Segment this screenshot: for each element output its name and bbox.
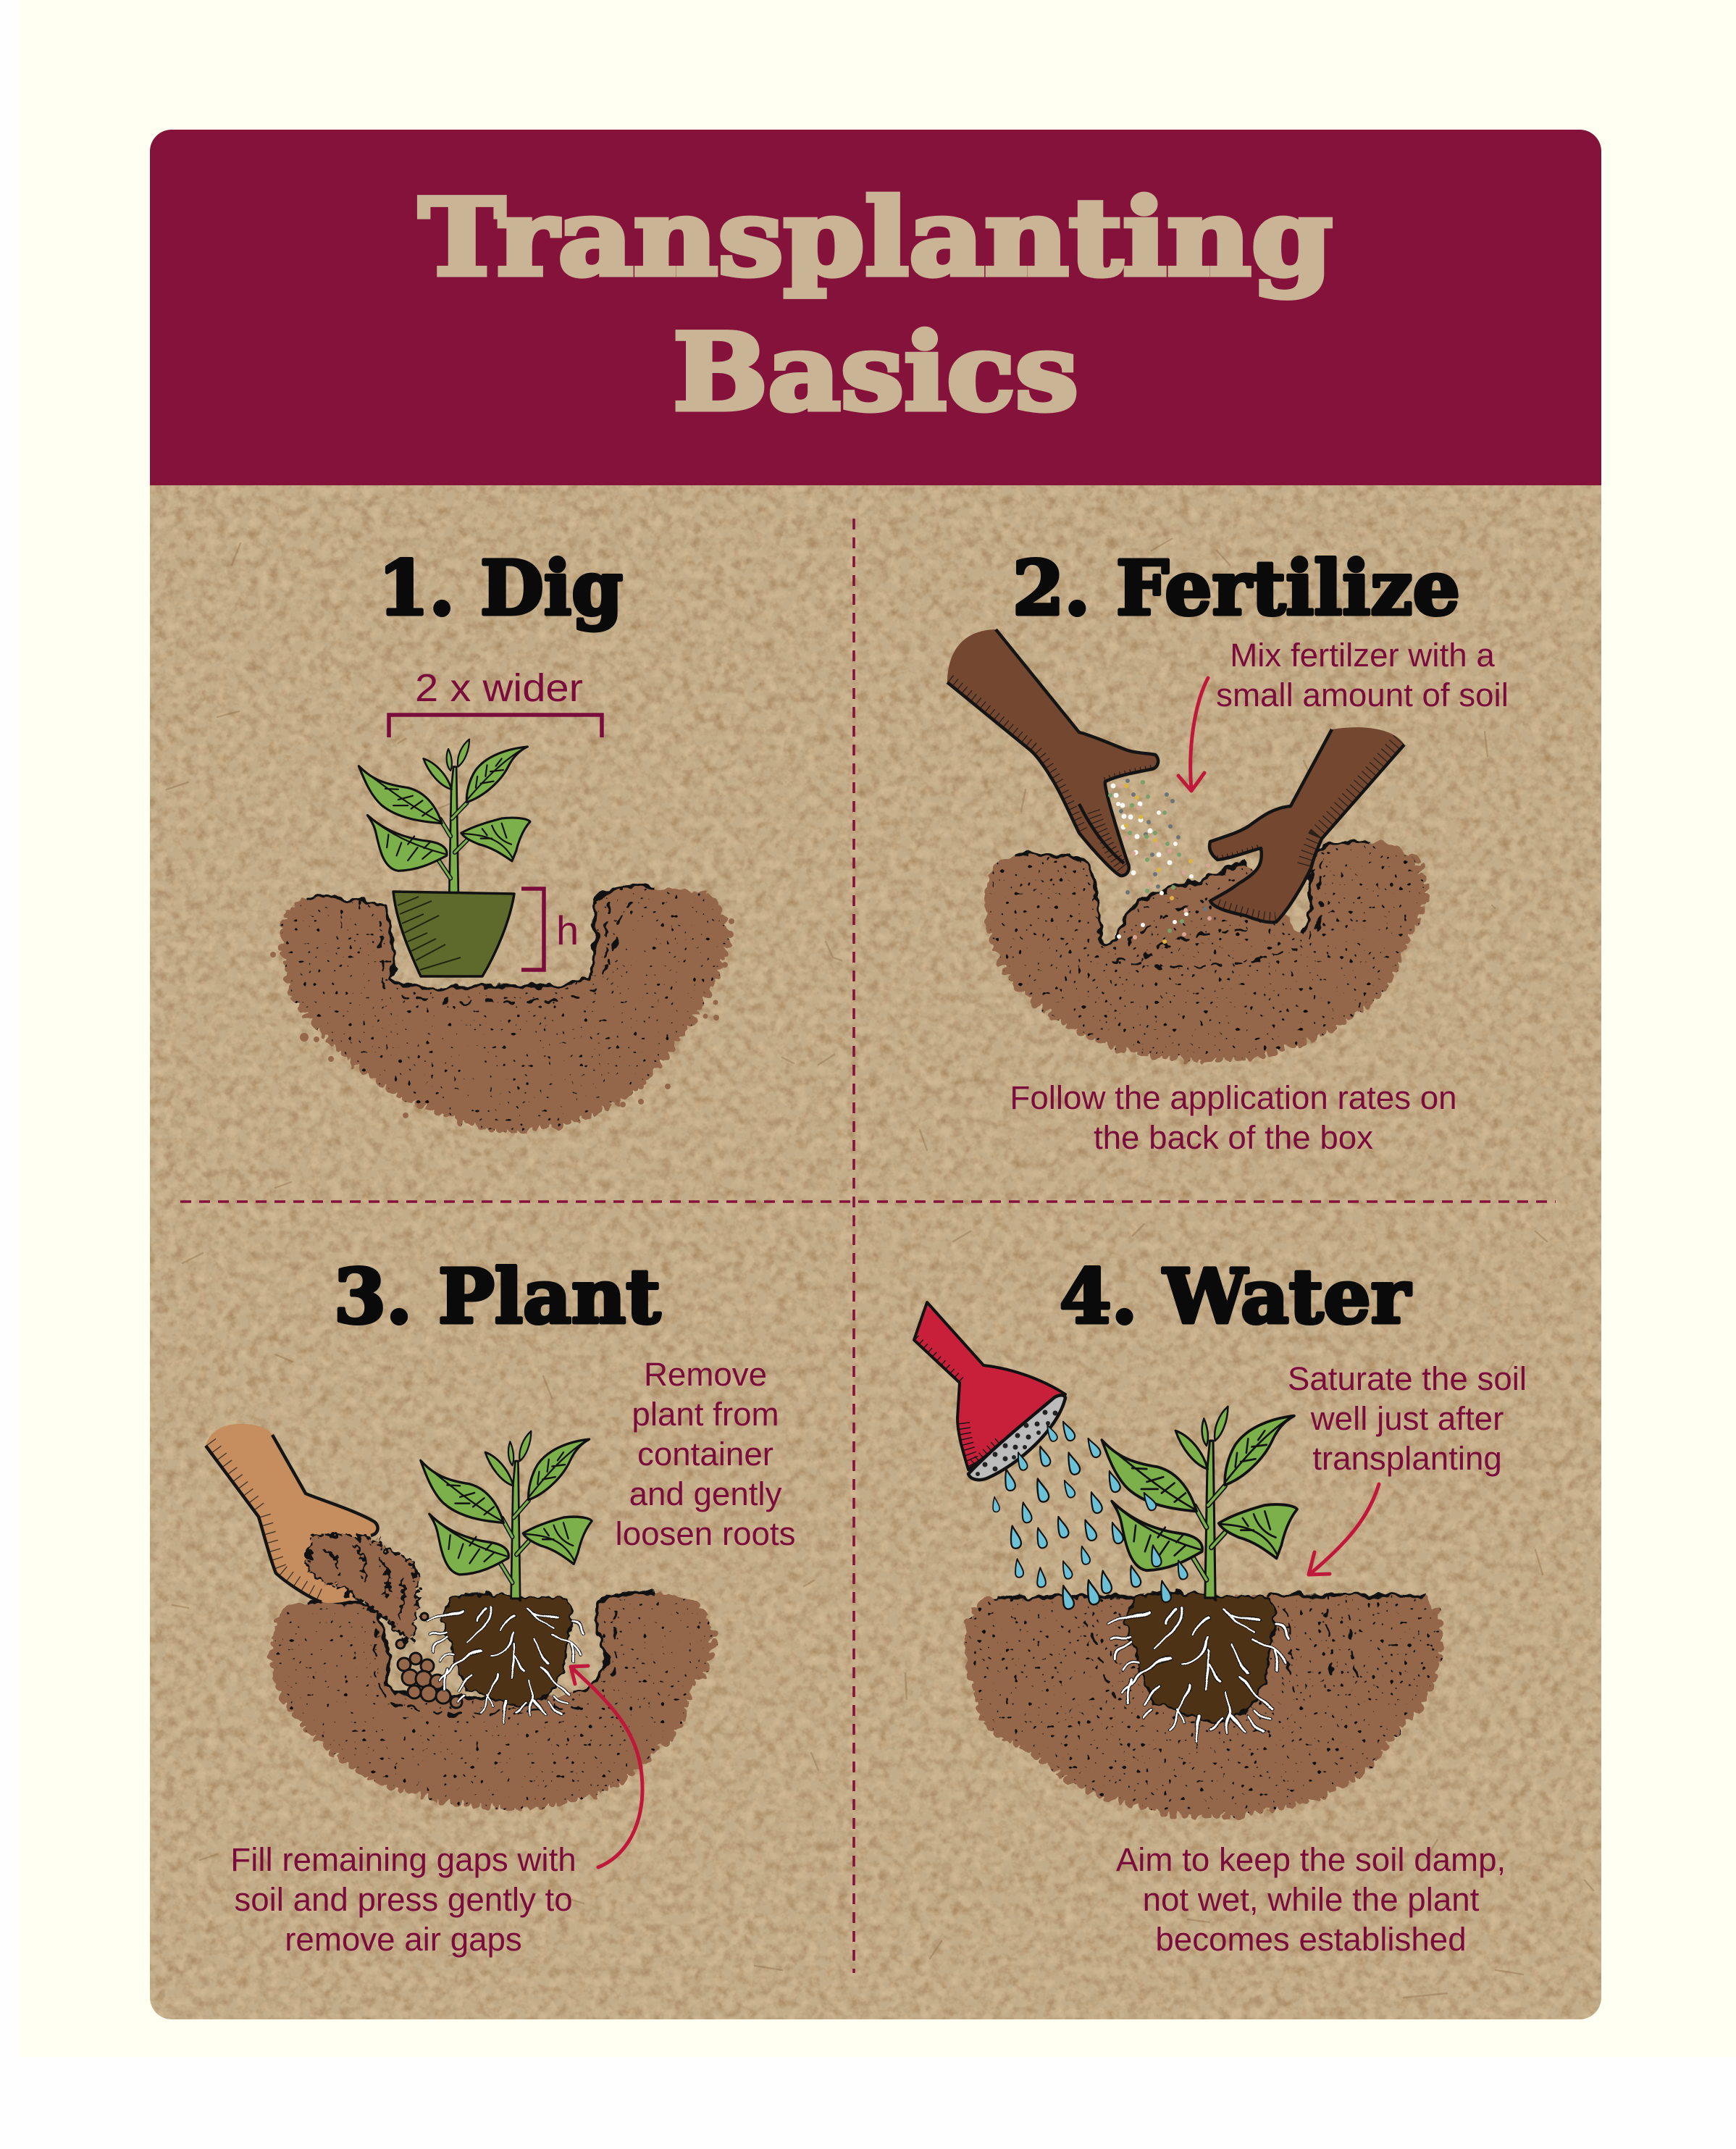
heading: 3. Plant: 3. Plant	[334, 1253, 661, 1341]
label: h: h	[556, 908, 579, 953]
water droplets	[993, 1420, 1188, 1609]
callout: remove plant: plant from	[632, 1396, 779, 1433]
note: fill gaps: remove air gaps	[285, 1921, 522, 1958]
soil clump in hand	[309, 1535, 418, 1641]
note: fill gaps: Fill remaining gaps with	[230, 1841, 576, 1878]
root ball	[1110, 1593, 1291, 1741]
hand with soil	[206, 1424, 418, 1641]
divider: vertical	[852, 519, 855, 1973]
plant in pot	[358, 740, 530, 976]
title: Transplanting	[419, 176, 1333, 300]
plant	[1102, 1407, 1297, 1598]
soil being filled into gap	[396, 1613, 462, 1708]
soil: dug hole	[284, 886, 725, 1128]
note: application rates: the back of the box	[1094, 1119, 1373, 1156]
crumbs	[270, 918, 734, 1118]
callout: saturate: well just after	[1310, 1400, 1504, 1437]
title	[419, 176, 1333, 435]
width bracket	[389, 715, 602, 737]
title: Basics	[673, 311, 1078, 435]
soil with pile	[985, 841, 1425, 1057]
callout: saturate: transplanting	[1312, 1440, 1502, 1477]
note: application rates: Follow the application rates on	[1010, 1079, 1457, 1116]
note: application rates	[1010, 1079, 1457, 1156]
arrow: to gap	[571, 1666, 642, 1867]
height bracket	[521, 889, 544, 970]
heading: 1. Dig: 1. Dig	[378, 545, 623, 632]
label: 2 x wider: 2 x wider	[415, 666, 583, 710]
callout: mix fertilizer: small amount of soil	[1216, 676, 1509, 713]
soil: planting hole	[272, 1593, 711, 1806]
panel: step 3 plant	[206, 1253, 795, 1958]
note: keep soil damp: becomes established	[1155, 1921, 1467, 1958]
note: keep soil damp	[1116, 1841, 1506, 1958]
fertilizer granules	[1108, 779, 1212, 944]
callout: saturate	[1288, 1360, 1527, 1477]
callout: remove plant: and gently	[629, 1475, 782, 1512]
root ball and plant	[421, 1431, 592, 1722]
arrow: to soil surface	[1309, 1484, 1379, 1575]
watering can	[914, 1302, 1065, 1480]
watering can rose	[968, 1395, 1065, 1480]
heading: 2. Fertilize: 2. Fertilize	[1012, 545, 1460, 632]
divider: horizontal	[180, 1200, 1556, 1203]
note: fill gaps: soil and press gently to	[234, 1881, 573, 1918]
callout: remove plant: loosen roots	[616, 1515, 795, 1552]
soil: filled ground	[965, 1595, 1439, 1814]
callout: remove plant	[616, 1356, 795, 1552]
panel: step 1 dig	[270, 545, 734, 1128]
note: keep soil damp: not wet, while the plant	[1143, 1881, 1480, 1918]
callout: mix fertilizer: Mix fertilzer with a	[1230, 637, 1495, 674]
hand: right	[1209, 727, 1404, 922]
header band	[150, 130, 1601, 485]
note: keep soil damp: Aim to keep the soil damp,	[1116, 1841, 1506, 1878]
heading: 4. Water: 4. Water	[1060, 1253, 1412, 1341]
callout: mix fertilizer	[1216, 637, 1509, 713]
callout: remove plant: container	[637, 1436, 773, 1473]
note: fill gaps	[230, 1841, 576, 1958]
arrow: to fertilizer	[1178, 678, 1208, 791]
hand: left	[947, 629, 1158, 876]
panel: step 2 fertilize	[947, 545, 1509, 1156]
callout: saturate: Saturate the soil	[1288, 1360, 1527, 1397]
panel: paper card	[150, 130, 1601, 2019]
pot	[393, 892, 514, 976]
panel: step 4 water	[914, 1253, 1527, 1958]
callout: remove plant: Remove	[644, 1356, 767, 1393]
